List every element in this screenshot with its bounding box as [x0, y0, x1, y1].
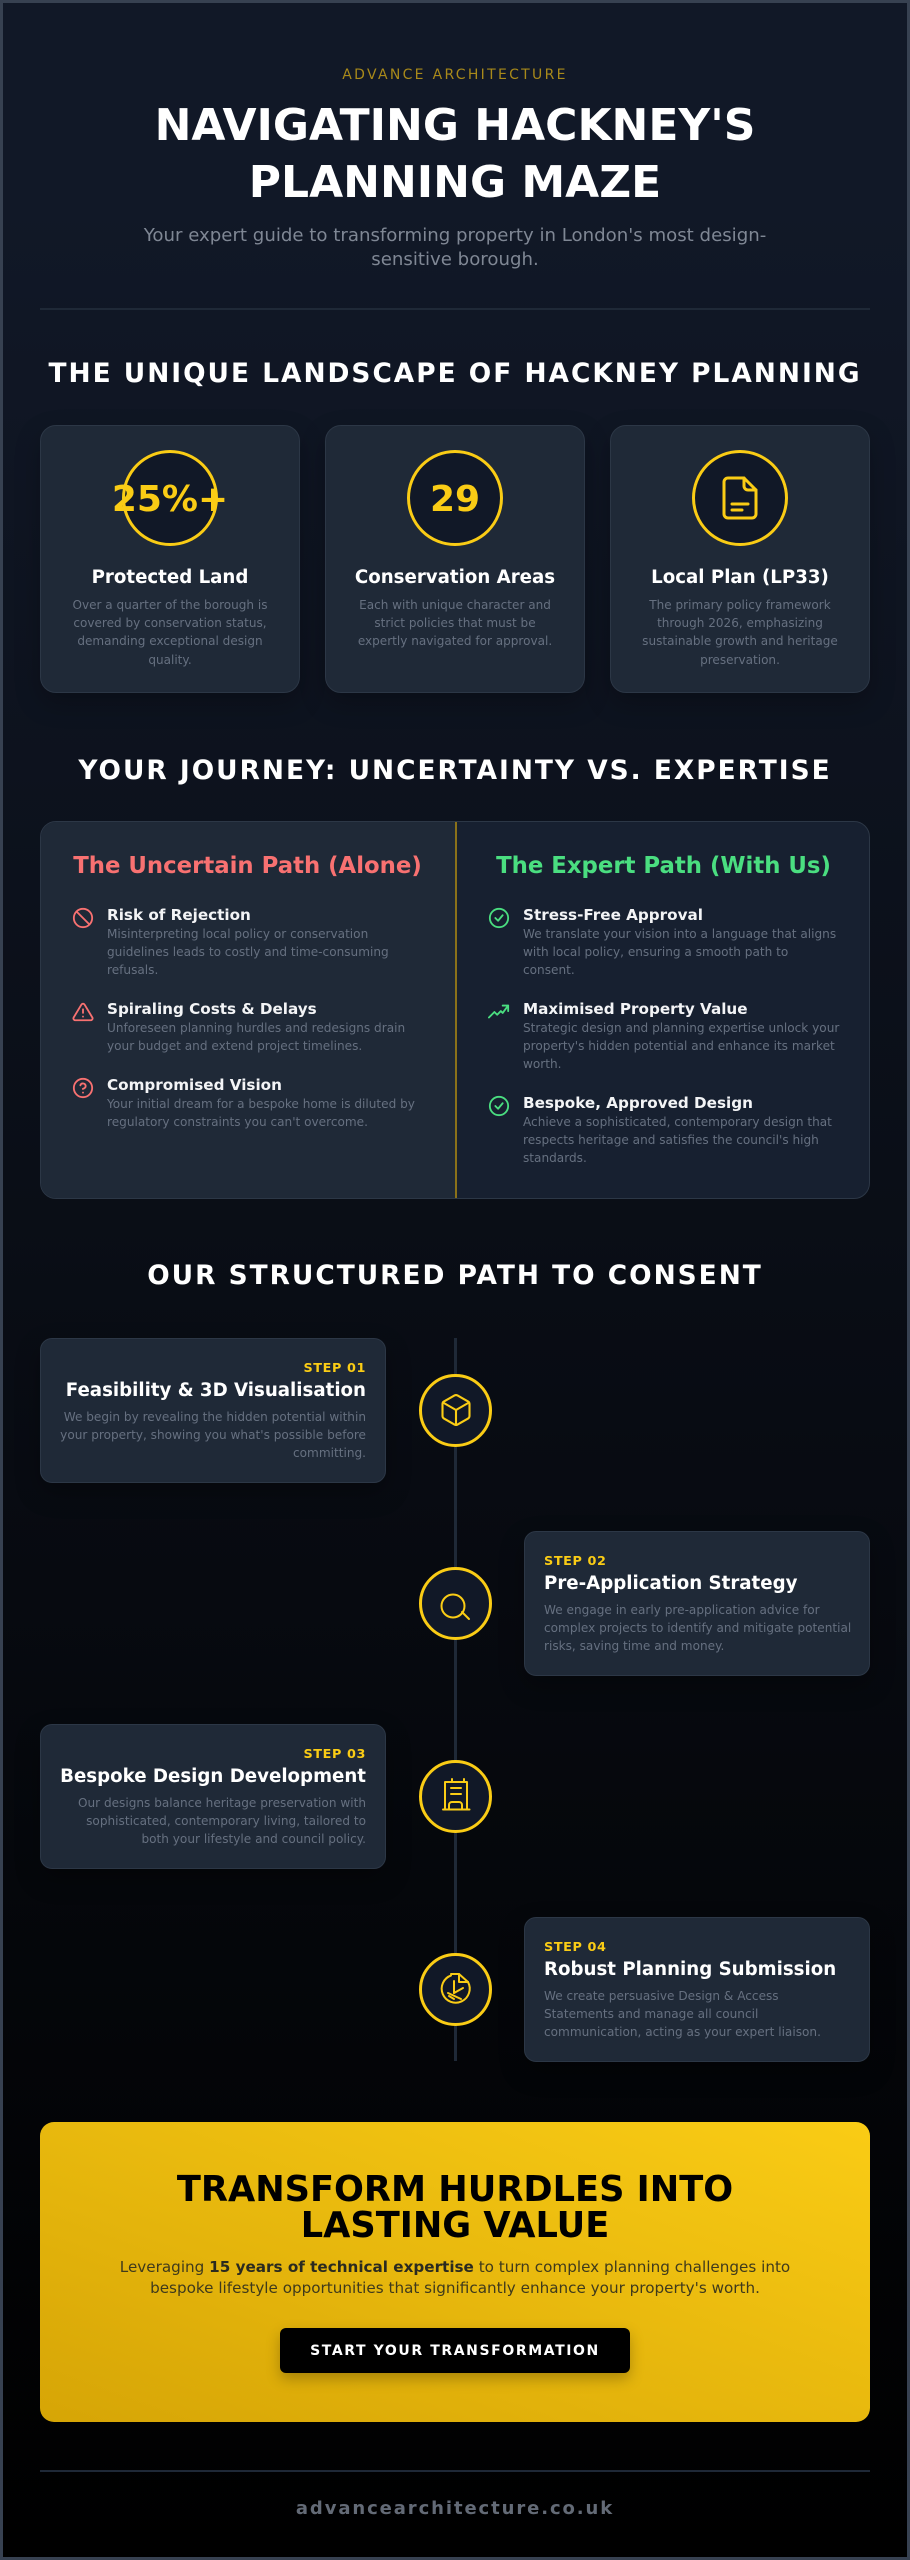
cta text: Leveraging 15 years of technical expertise to turn complex planning challenges into — [120, 2258, 790, 2276]
title — [155, 100, 755, 208]
item text — [523, 1115, 832, 1165]
item text: your budget and extend project timelines. — [107, 1039, 362, 1053]
item: risk of rejection — [72, 906, 389, 977]
item text: regulatory constraints you can't overcome. — [107, 1115, 368, 1129]
step title: Robust Planning Submission — [544, 1959, 836, 1980]
step text — [544, 1603, 851, 1653]
heading: path section: OUR STRUCTURED PATH TO CONSENT — [147, 1260, 763, 1291]
item text: Strategic design and planning expertise unlock your — [523, 1021, 839, 1035]
item title: Stress-Free Approval — [523, 906, 703, 924]
item: spiraling costs — [72, 1000, 405, 1053]
step text — [78, 1796, 366, 1846]
item title: Bespoke, Approved Design — [523, 1094, 753, 1112]
panel: local plan card — [610, 425, 870, 693]
card title: Conservation Areas — [355, 567, 555, 588]
card text: Over a quarter of the borough is — [72, 598, 268, 612]
item title: Compromised Vision — [107, 1076, 282, 1094]
icon: trending up — [488, 1004, 510, 1018]
step text: We begin by revealing the hidden potential within — [64, 1410, 366, 1424]
item text — [523, 927, 836, 977]
subtitle — [144, 225, 766, 270]
item: bespoke design — [488, 1094, 832, 1165]
step text: We create persuasive Design & Access — [544, 1989, 779, 2003]
timeline line — [454, 1338, 456, 2061]
item text: refusals. — [107, 963, 158, 977]
stat circle — [407, 450, 503, 546]
item text: with local policy, ensuring a smooth path to — [523, 945, 788, 959]
icon: warning triangle — [72, 1002, 94, 1022]
step number: STEP 01 — [303, 1361, 366, 1376]
step text: your property, showing you what's possible before — [60, 1428, 366, 1442]
subtitle: Your expert guide to transforming property in London's most design- — [144, 225, 766, 246]
icon: check circle — [488, 1096, 510, 1116]
item text: standards. — [523, 1151, 587, 1165]
step text: communication, acting as your expert liaison. — [544, 2025, 821, 2039]
step text — [60, 1410, 366, 1460]
panel: step 2 — [524, 1531, 870, 1676]
icon: document — [722, 476, 758, 520]
item text: Achieve a sophisticated, contemporary design that — [523, 1115, 832, 1129]
item title: Risk of Rejection — [107, 906, 251, 924]
step text: We engage in early pre-application advice for — [544, 1603, 820, 1617]
step number: STEP 02 — [544, 1554, 607, 1569]
item text: Misinterpreting local policy or conservation — [107, 927, 368, 941]
card text: sustainable growth and heritage — [642, 634, 838, 648]
step number: STEP 04 — [544, 1940, 607, 1955]
icon: submission node — [419, 1952, 492, 2026]
heading: journey section: YOUR JOURNEY: UNCERTAINTY VS. EXPERTISE — [78, 755, 832, 786]
item text: respects heritage and satisfies the council's high — [523, 1133, 819, 1147]
item: stress-free approval — [488, 906, 836, 977]
card text: Each with unique character and — [359, 598, 551, 612]
step text: committing. — [293, 1446, 366, 1460]
card title: Local Plan (LP33) — [651, 567, 829, 588]
title: PLANNING MAZE — [249, 157, 661, 208]
stat circle — [122, 450, 218, 546]
step text: complex projects to identify and mitigate potential — [544, 1621, 851, 1635]
card text: quality. — [148, 653, 192, 667]
panel: step 3 — [40, 1724, 386, 1869]
item text: Unforeseen planning hurdles and redesigns drain — [107, 1021, 405, 1035]
icon: cube node — [419, 1374, 492, 1446]
panel: uncertain path — [72, 853, 422, 1129]
step text: Statements and manage all council — [544, 2007, 758, 2021]
item text: guidelines leads to costly and time-consuming — [107, 945, 389, 959]
step title: Feasibility & 3D Visualisation — [66, 1380, 366, 1401]
item text: We translate your vision into a language that aligns — [523, 927, 836, 941]
icon: search node — [419, 1566, 492, 1640]
item text — [107, 927, 389, 977]
step title: Pre-Application Strategy — [544, 1573, 797, 1594]
item: compromised vision — [72, 1076, 415, 1129]
card text: preservation. — [700, 653, 780, 667]
card text: covered by conservation status, — [73, 616, 267, 630]
item text: consent. — [523, 963, 575, 977]
step text: risks, saving time and money. — [544, 1639, 724, 1653]
item title: Spiraling Costs & Delays — [107, 1000, 317, 1018]
panel: protected land card — [40, 425, 300, 693]
cta text: bespoke lifestyle opportunities that significantly enhance your property's worth. — [150, 2279, 760, 2297]
icon: building node — [419, 1760, 492, 1832]
stat: 25%+: 25%+ — [112, 479, 228, 520]
cta button — [280, 2328, 630, 2373]
footer url: advancearchitecture.co.uk — [296, 2498, 614, 2519]
panel: expert path — [488, 853, 840, 1165]
item text: worth. — [523, 1057, 562, 1071]
cta text — [120, 2258, 790, 2297]
eyebrow: brand name: ADVANCE ARCHITECTURE — [342, 67, 568, 83]
column heading: The Expert Path (With Us) — [496, 853, 831, 879]
item text — [107, 1097, 415, 1129]
card title: Protected Land — [92, 567, 248, 588]
item text: property's hidden potential and enhance its market — [523, 1039, 835, 1053]
step text: Our designs balance heritage preservation with — [78, 1796, 366, 1810]
card text: strict policies that must be — [374, 616, 536, 630]
panel: step 4 — [524, 1917, 870, 2062]
panel: conservation areas card — [325, 425, 585, 693]
panel: call to action — [40, 2122, 870, 2422]
cta heading: LASTING VALUE — [301, 2204, 609, 2246]
item: maximised value — [488, 1000, 840, 1071]
heading: landscape section: THE UNIQUE LANDSCAPE OF HACKNEY PLANNING — [48, 358, 862, 389]
stat: 29: 29 — [430, 479, 480, 520]
item text: Your initial dream for a bespoke home is diluted by — [107, 1097, 415, 1111]
panel: step 1 — [40, 1338, 386, 1483]
step title: Bespoke Design Development — [60, 1766, 366, 1787]
title: NAVIGATING HACKNEY'S — [155, 100, 755, 151]
card text — [358, 598, 552, 648]
icon: ban — [72, 908, 94, 928]
step text: sophisticated, contemporary living, tailored to — [86, 1814, 366, 1828]
icon: check circle — [488, 908, 510, 928]
item text — [107, 1021, 405, 1053]
card text — [642, 598, 838, 667]
cta button: START YOUR TRANSFORMATION — [310, 2343, 600, 2359]
column heading: The Uncertain Path (Alone) — [73, 853, 422, 879]
card text — [72, 598, 268, 667]
item title: Maximised Property Value — [523, 1000, 748, 1018]
cta heading — [177, 2168, 733, 2246]
step text: both your lifestyle and council policy. — [141, 1832, 366, 1846]
cta heading: TRANSFORM HURDLES INTO — [177, 2168, 733, 2210]
panel: comparison — [40, 821, 870, 1199]
card text: expertly navigated for approval. — [358, 634, 552, 648]
subtitle: sensitive borough. — [371, 249, 539, 270]
step number: STEP 03 — [303, 1747, 366, 1762]
icon circle with document — [692, 450, 788, 546]
card text: The primary policy framework — [649, 598, 831, 612]
card text: through 2026, emphasizing — [657, 616, 823, 630]
item text — [523, 1021, 840, 1071]
icon: question circle — [72, 1078, 94, 1098]
card text: demanding exceptional design — [77, 634, 263, 648]
step text — [544, 1989, 821, 2039]
